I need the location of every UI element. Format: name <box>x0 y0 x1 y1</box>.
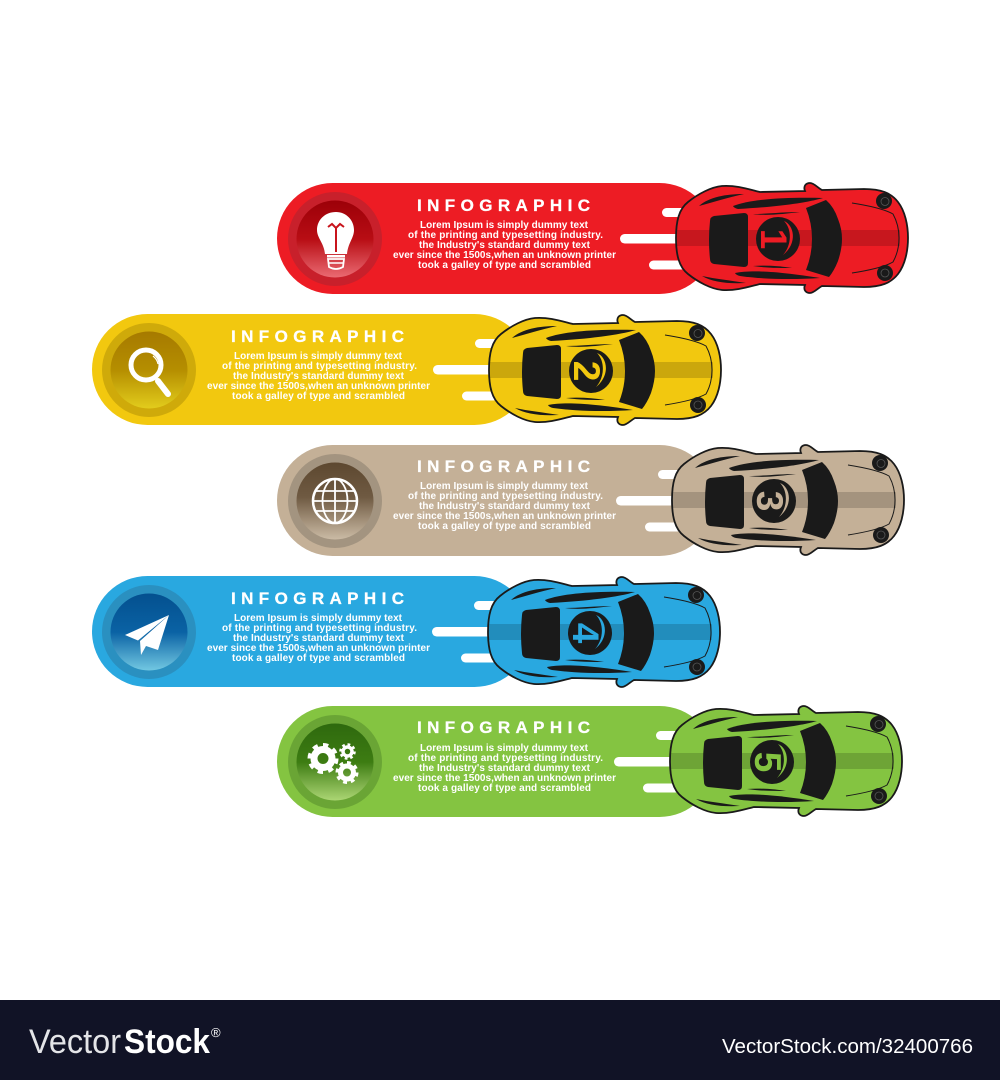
logo text: Stock <box>124 1023 210 1061</box>
icon: gears <box>288 715 382 809</box>
body text <box>207 351 430 402</box>
car 2 <box>489 315 721 425</box>
body text: took a galley of type and scrambled <box>418 521 591 532</box>
car 1 <box>676 183 908 293</box>
image id: VectorStock.com/32400766 <box>722 1036 973 1058</box>
speed streaks <box>620 208 686 270</box>
car 5 <box>670 706 902 816</box>
car 2: 2 <box>566 361 607 381</box>
body text: took a galley of type and scrambled <box>232 391 405 402</box>
watermark bar <box>0 1000 1000 1080</box>
body text: Lorem Ipsum is simply dummy text <box>234 613 403 624</box>
icon: light bulb <box>288 192 382 286</box>
heading: INFOGRAPHIC <box>231 327 404 346</box>
heading: INFOGRAPHIC <box>417 196 590 215</box>
panel: row 5 green <box>277 706 902 817</box>
body text: ever since the 1500s,when an unknown printer <box>393 250 616 261</box>
logo text: Vector <box>29 1023 121 1061</box>
car 4 <box>488 577 720 687</box>
speed streaks <box>616 470 682 532</box>
body text: of the printing and typesetting industry. <box>408 491 603 502</box>
body text: of the printing and typesetting industry. <box>408 753 603 764</box>
panel: row 4 blue <box>92 576 720 687</box>
heading: INFOGRAPHIC <box>231 589 404 608</box>
body text: took a galley of type and scrambled <box>232 653 405 664</box>
panel: row 2 yellow <box>92 314 721 425</box>
body text: took a galley of type and scrambled <box>418 260 591 271</box>
pill <box>277 183 715 294</box>
car 3 <box>672 445 904 555</box>
speed streaks <box>432 601 498 662</box>
icon: paper plane <box>102 585 196 679</box>
pill <box>277 706 715 817</box>
speed streaks <box>433 339 499 400</box>
car 1: 1 <box>753 229 794 249</box>
panel: row 1 red <box>277 183 908 294</box>
pill <box>92 314 530 425</box>
heading: INFOGRAPHIC <box>417 457 590 476</box>
body text: the Industry's standard dummy text <box>233 371 405 382</box>
body text: took a galley of type and scrambled <box>418 783 591 794</box>
body text: the Industry's standard dummy text <box>419 501 591 512</box>
body text: Lorem Ipsum is simply dummy text <box>420 481 589 492</box>
pill <box>92 576 530 687</box>
body text: Lorem Ipsum is simply dummy text <box>420 743 589 754</box>
body text: of the printing and typesetting industry. <box>222 361 417 372</box>
body text: ever since the 1500s,when an unknown printer <box>207 381 430 392</box>
car 5: 5 <box>747 752 788 772</box>
body text: of the printing and typesetting industry. <box>222 623 417 634</box>
body text: the Industry's standard dummy text <box>233 633 405 644</box>
car 3: 3 <box>749 491 790 511</box>
pill <box>277 445 715 556</box>
body text: ever since the 1500s,when an unknown printer <box>393 773 616 784</box>
body text <box>207 613 430 664</box>
body text: ever since the 1500s,when an unknown printer <box>207 643 430 654</box>
logo text: ® <box>211 1025 221 1040</box>
body text: the Industry's standard dummy text <box>419 240 591 251</box>
body text: the Industry's standard dummy text <box>419 763 591 774</box>
body text: Lorem Ipsum is simply dummy text <box>420 220 589 231</box>
body text <box>393 220 616 271</box>
body text <box>393 743 616 794</box>
speed streaks <box>614 731 680 792</box>
body text: Lorem Ipsum is simply dummy text <box>234 351 403 362</box>
heading: INFOGRAPHIC <box>417 718 590 737</box>
icon: magnifier <box>102 323 196 417</box>
body text: of the printing and typesetting industry. <box>408 230 603 241</box>
panel: row 3 tan <box>277 445 904 556</box>
icon: globe <box>288 454 382 548</box>
car 4: 4 <box>565 623 606 644</box>
logo text <box>29 1023 221 1061</box>
body text: ever since the 1500s,when an unknown printer <box>393 511 616 522</box>
body text <box>393 481 616 532</box>
